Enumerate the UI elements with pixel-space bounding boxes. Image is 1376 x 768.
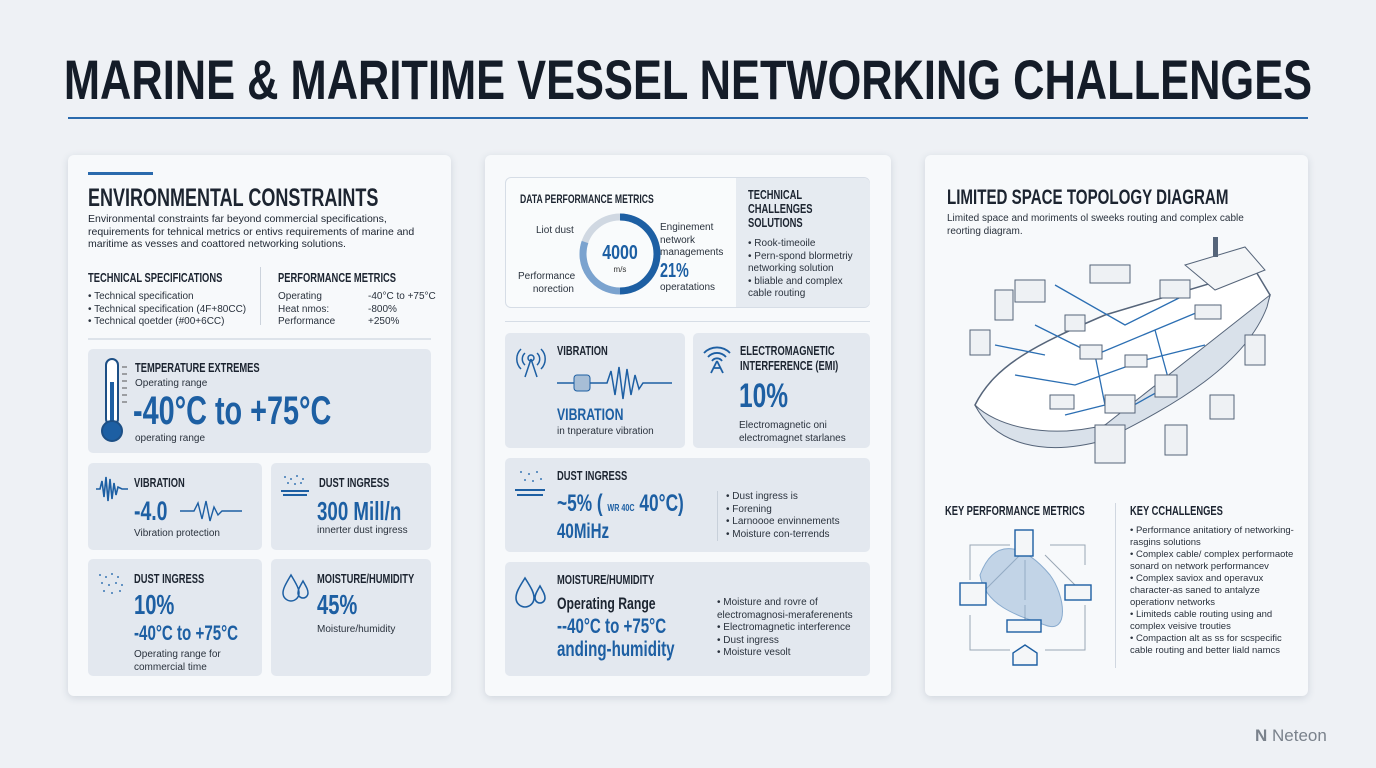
card: dust ingress: 300 Mill/n — [317, 496, 401, 526]
big value: -40°C to +75°C — [133, 389, 331, 433]
card: dust ingress: innerter dust ingress — [317, 525, 408, 536]
key challenges: Complex cable/ complex performaote sonard on network performancev — [1130, 549, 1293, 572]
performance metrics — [278, 270, 436, 327]
data performance metrics box — [505, 177, 870, 308]
network diagram — [959, 529, 1092, 666]
key challenges — [1130, 503, 1294, 656]
performance metrics: +250% — [368, 316, 399, 327]
donut chart — [580, 214, 660, 294]
card: temperature extremes: TEMPERATURE EXTREMES — [135, 360, 260, 375]
data performance metrics box: Performance norection — [518, 271, 575, 294]
card: moisture/humidity: anding-humidity — [557, 638, 675, 661]
card: EMI: INTERFERENCE (EMI) — [740, 358, 838, 373]
card: EMI: electromagnet starlanes — [739, 432, 846, 444]
title underline — [68, 117, 1308, 119]
key challenges: KEY CCHALLENGES — [1130, 503, 1223, 518]
card: EMI: 10% — [739, 377, 788, 415]
data performance metrics box: managements — [660, 247, 723, 258]
card: dust ingress: DUST INGRESS — [557, 468, 627, 483]
card: moisture/humidity: Moisture vesolt — [723, 647, 791, 658]
card: moisture/humidity: Moisture and rovre of electromagnosi-meraferenents — [717, 597, 853, 620]
icon: thermometer — [101, 358, 127, 442]
card: vibration: VIBRATION — [557, 405, 623, 424]
card: EMI: ELECTROMAGNETIC — [740, 343, 835, 358]
card: vibration: VIBRATION — [557, 343, 608, 358]
card: vibration — [505, 333, 685, 448]
key challenges: Compaction alt as ss for scspecific cable routing and better liald namcs — [1130, 633, 1282, 656]
technical challenges solutions: Rook-timeoile — [754, 238, 815, 249]
card: dust ingress — [505, 458, 870, 552]
card: temperature extremes — [88, 349, 431, 453]
donut chart: 4000 — [602, 241, 638, 263]
performance metrics: PERFORMANCE METRICS — [278, 270, 396, 285]
card: vibration: VIBRATION — [134, 475, 185, 490]
card: dust ingress — [271, 463, 431, 550]
technical challenges solutions: TECHNICAL — [748, 187, 802, 202]
description: Limited space and moriments ol sweeks routing and complex cable reorting diagram. — [947, 213, 1244, 236]
performance metrics: -800% — [368, 304, 397, 314]
technical challenges solutions: bliable and complex cable routing — [748, 276, 843, 299]
card: moisture/humidity — [505, 562, 870, 676]
logo: Neteon: N Neteon — [1255, 726, 1327, 745]
donut chart: m/s — [614, 265, 626, 274]
technical challenges solutions: CHALLENGES — [748, 201, 812, 216]
ship illustration — [970, 237, 1271, 464]
card: dust ingress: ~5% ( WR 40C 40°C) — [557, 490, 684, 517]
heading: ENVIRONMENTAL CONSTRAINTS — [88, 184, 378, 212]
card: moisture/humidity: Operating Range — [557, 594, 656, 613]
card: temperature extremes: operating range — [135, 433, 205, 444]
card: moisture/humidity: MOISTURE/HUMIDITY — [317, 571, 414, 586]
card: dust ingress 2 — [88, 559, 262, 676]
card: dust ingress: DUST INGRESS — [319, 475, 389, 490]
card: vibration: -4.0 — [134, 496, 168, 526]
card: vibration: in tnperature vibration — [557, 426, 654, 437]
technical specifications: Technical specification (4F+80CC) — [94, 304, 246, 314]
card: moisture/humidity: Dust ingress — [723, 634, 779, 646]
technical specifications: TECHNICAL SPECIFICATIONS — [88, 270, 222, 285]
technical specifications: Technical specification — [94, 291, 194, 302]
technical specifications: Technical qoetder (#00+6CC) — [94, 316, 224, 327]
card: dust ingress: Larnoooe envinnements — [732, 516, 840, 527]
card: moisture/humidity: MOISTURE/HUMIDITY — [557, 572, 654, 587]
card: dust ingress 2: Operating range for — [134, 649, 221, 660]
card: moisture/humidity — [271, 559, 431, 676]
card: EMI: Electromagnetic oni — [739, 420, 827, 431]
title: MARINE & MARITIME VESSEL NETWORKING CHALLENGES — [64, 48, 1312, 111]
card: EMI — [693, 333, 870, 448]
card: temperature extremes: Operating range — [135, 378, 207, 389]
panel: limited space topology — [925, 155, 1308, 696]
key challenges: Performance anitatiory of networking-rasgins solutions — [1130, 525, 1294, 548]
performance metrics: -40°C to +75°C — [368, 291, 436, 302]
card: moisture/humidity: Moisture/humidity — [317, 624, 395, 635]
card: vibration — [88, 463, 262, 550]
data performance metrics box: DATA PERFORMANCE METRICS — [520, 192, 654, 206]
heading: LIMITED SPACE TOPOLOGY DIAGRAM — [947, 186, 1228, 209]
card: moisture/humidity: --40°C to +75°C — [557, 615, 666, 638]
card: dust ingress 2: commercial time — [134, 662, 207, 672]
heading accent — [88, 172, 153, 175]
key challenges: Complex saviox and operavux character-as saned to antalyze operationv networks — [1130, 573, 1263, 608]
card: dust ingress: Forening — [732, 504, 772, 514]
technical specifications — [88, 270, 246, 327]
card: moisture/humidity: 45% — [317, 589, 357, 620]
intro text: Environmental constraints far beyond commercial specifications, requirements for tehnical metrics or entivs requirements of marine and maritime as vesses and coattored networking solutions. — [88, 213, 414, 250]
card: dust ingress 2: -40°C to +75°C — [134, 622, 238, 645]
performance metrics: Operating — [278, 291, 322, 302]
data performance metrics box: Liot dust — [536, 225, 574, 236]
card: dust ingress 2: DUST INGRESS — [134, 571, 204, 586]
performance metrics: Heat nmos: — [278, 304, 329, 314]
card: dust ingress 2: 10% — [134, 589, 174, 620]
data performance metrics box: Enginement — [660, 222, 713, 233]
data performance metrics box: operatations — [660, 282, 715, 293]
technical challenges solutions — [736, 178, 870, 307]
card: moisture/humidity: Electromagnetic interference — [723, 622, 851, 633]
data performance metrics box: 21% — [660, 260, 689, 282]
card: dust ingress: Dust ingress is — [732, 491, 798, 502]
data performance metrics box: network — [660, 234, 695, 246]
technical challenges solutions: Pern-spond blormetriy networking solution — [748, 250, 853, 274]
panel: environmental constraints — [68, 155, 451, 696]
card: dust ingress: 40MiHz — [557, 520, 609, 543]
performance metrics: Performance — [278, 316, 335, 327]
card: dust ingress: Moisture con-terrends — [732, 528, 830, 540]
technical challenges solutions: SOLUTIONS — [748, 215, 803, 230]
key challenges: Limiteds cable routing using and complex veisive trouties — [1130, 609, 1272, 632]
key performance metrics: KEY PERFORMANCE METRICS — [945, 503, 1085, 518]
panel: data performance — [485, 155, 891, 696]
card: vibration: Vibration protection — [134, 528, 220, 539]
